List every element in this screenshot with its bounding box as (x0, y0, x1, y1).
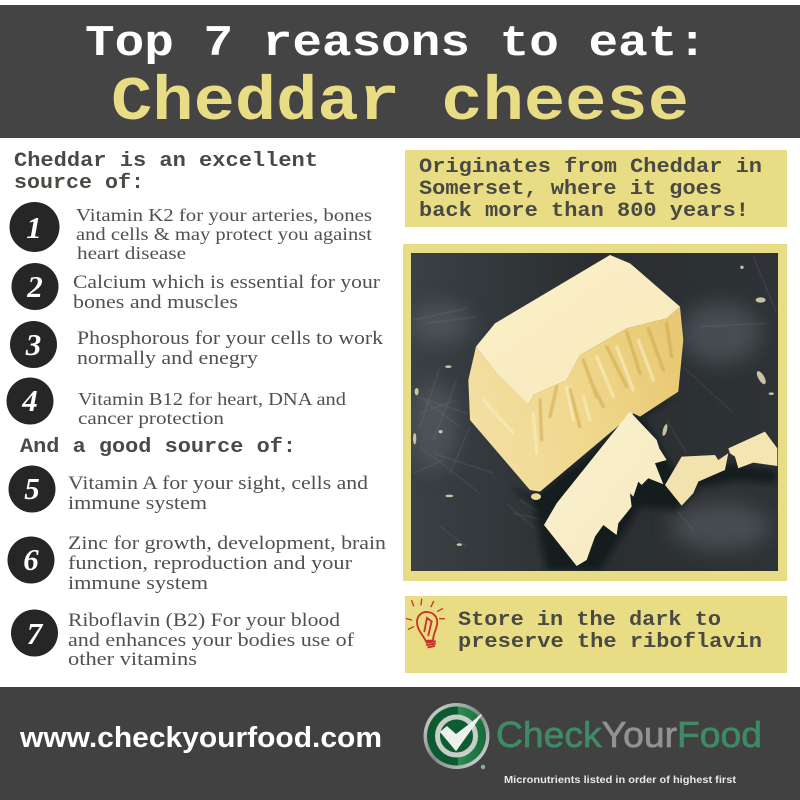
text 2: bones and muscles (73, 292, 238, 313)
badge 5 (8, 466, 56, 512)
footer band (0, 687, 800, 800)
callout: origin: Somerset, where it goes (419, 178, 722, 201)
badge 1: 1 (26, 210, 42, 245)
badge 7 (11, 610, 58, 656)
icon: light bulb (406, 599, 444, 647)
text 1: and cells & may protect you against (76, 224, 372, 244)
callout: origin: Originates from Cheddar in (419, 156, 762, 179)
tip text: Store in the dark to (458, 609, 721, 632)
board haze (410, 303, 770, 550)
text 6: immune system (68, 573, 208, 594)
text 2: Calcium which is essential for your (73, 272, 381, 293)
callout: origin (405, 150, 787, 227)
item 5 (8, 466, 369, 514)
text 6: function, reproduction and your (68, 553, 353, 574)
heading: excellent source: Cheddar is an excellent (14, 150, 318, 173)
text 1: heart disease (77, 243, 186, 263)
badge 3: 3 (25, 327, 41, 362)
text 6: Zinc for growth, development, brain (68, 533, 387, 554)
title subject: Cheddar cheese (111, 67, 689, 138)
item 6 (8, 533, 387, 594)
text 3: Phosphorous for your cells to work (77, 328, 384, 349)
heading: excellent source: source of: (14, 172, 144, 195)
badge 4: 4 (21, 383, 38, 418)
text 7: other vitamins (68, 649, 197, 670)
item 3 (10, 321, 384, 369)
badge 2 (12, 263, 58, 310)
cheese crumbs (665, 453, 728, 506)
text 4: cancer protection (78, 408, 224, 428)
heading: good source: And a good source of: (20, 436, 296, 459)
footnote: Micronutrients listed in order of highest first (504, 774, 737, 786)
item 7 (11, 610, 355, 670)
tip text: preserve the riboflavin (458, 631, 762, 654)
photo: cheddar on slate (410, 253, 778, 571)
badge 7: 7 (27, 616, 44, 651)
text 5: Vitamin A for your sight, cells and (68, 473, 369, 494)
photo frame (403, 244, 787, 581)
badge 1 (10, 202, 60, 252)
badge 3 (10, 321, 57, 368)
heading: excellent source (14, 150, 318, 195)
item 2 (12, 263, 381, 313)
badge 6 (8, 536, 54, 584)
text 3: normally and enegry (77, 348, 259, 369)
website address: www.checkyourfood.com (19, 722, 382, 754)
text 4: Vitamin B12 for heart, DNA and (78, 389, 346, 409)
callout: origin: back more than 800 years! (419, 200, 749, 223)
badge 2: 2 (26, 269, 43, 304)
text 5: immune system (68, 493, 207, 514)
item 1 (10, 202, 372, 263)
cheese slice (544, 412, 667, 566)
callout: storage tip (405, 596, 787, 673)
badge 4 (6, 378, 54, 424)
title line: Top 7 reasons to eat: (85, 19, 707, 69)
text 7: Riboflavin (B2) For your blood (68, 610, 341, 631)
text 1: Vitamin K2 for your arteries, bones (76, 205, 372, 225)
logo mark (424, 703, 490, 769)
badge 6: 6 (23, 542, 39, 577)
shadow under cheese (510, 397, 777, 570)
cheese front face (468, 307, 683, 492)
item 4 (6, 378, 346, 428)
logo wordmark: CheckYourFood (496, 714, 762, 755)
cheese top face (476, 255, 680, 405)
text 7: and enhances your bodies use of (68, 630, 355, 651)
header banner (0, 5, 800, 138)
badge 5: 5 (24, 471, 40, 506)
